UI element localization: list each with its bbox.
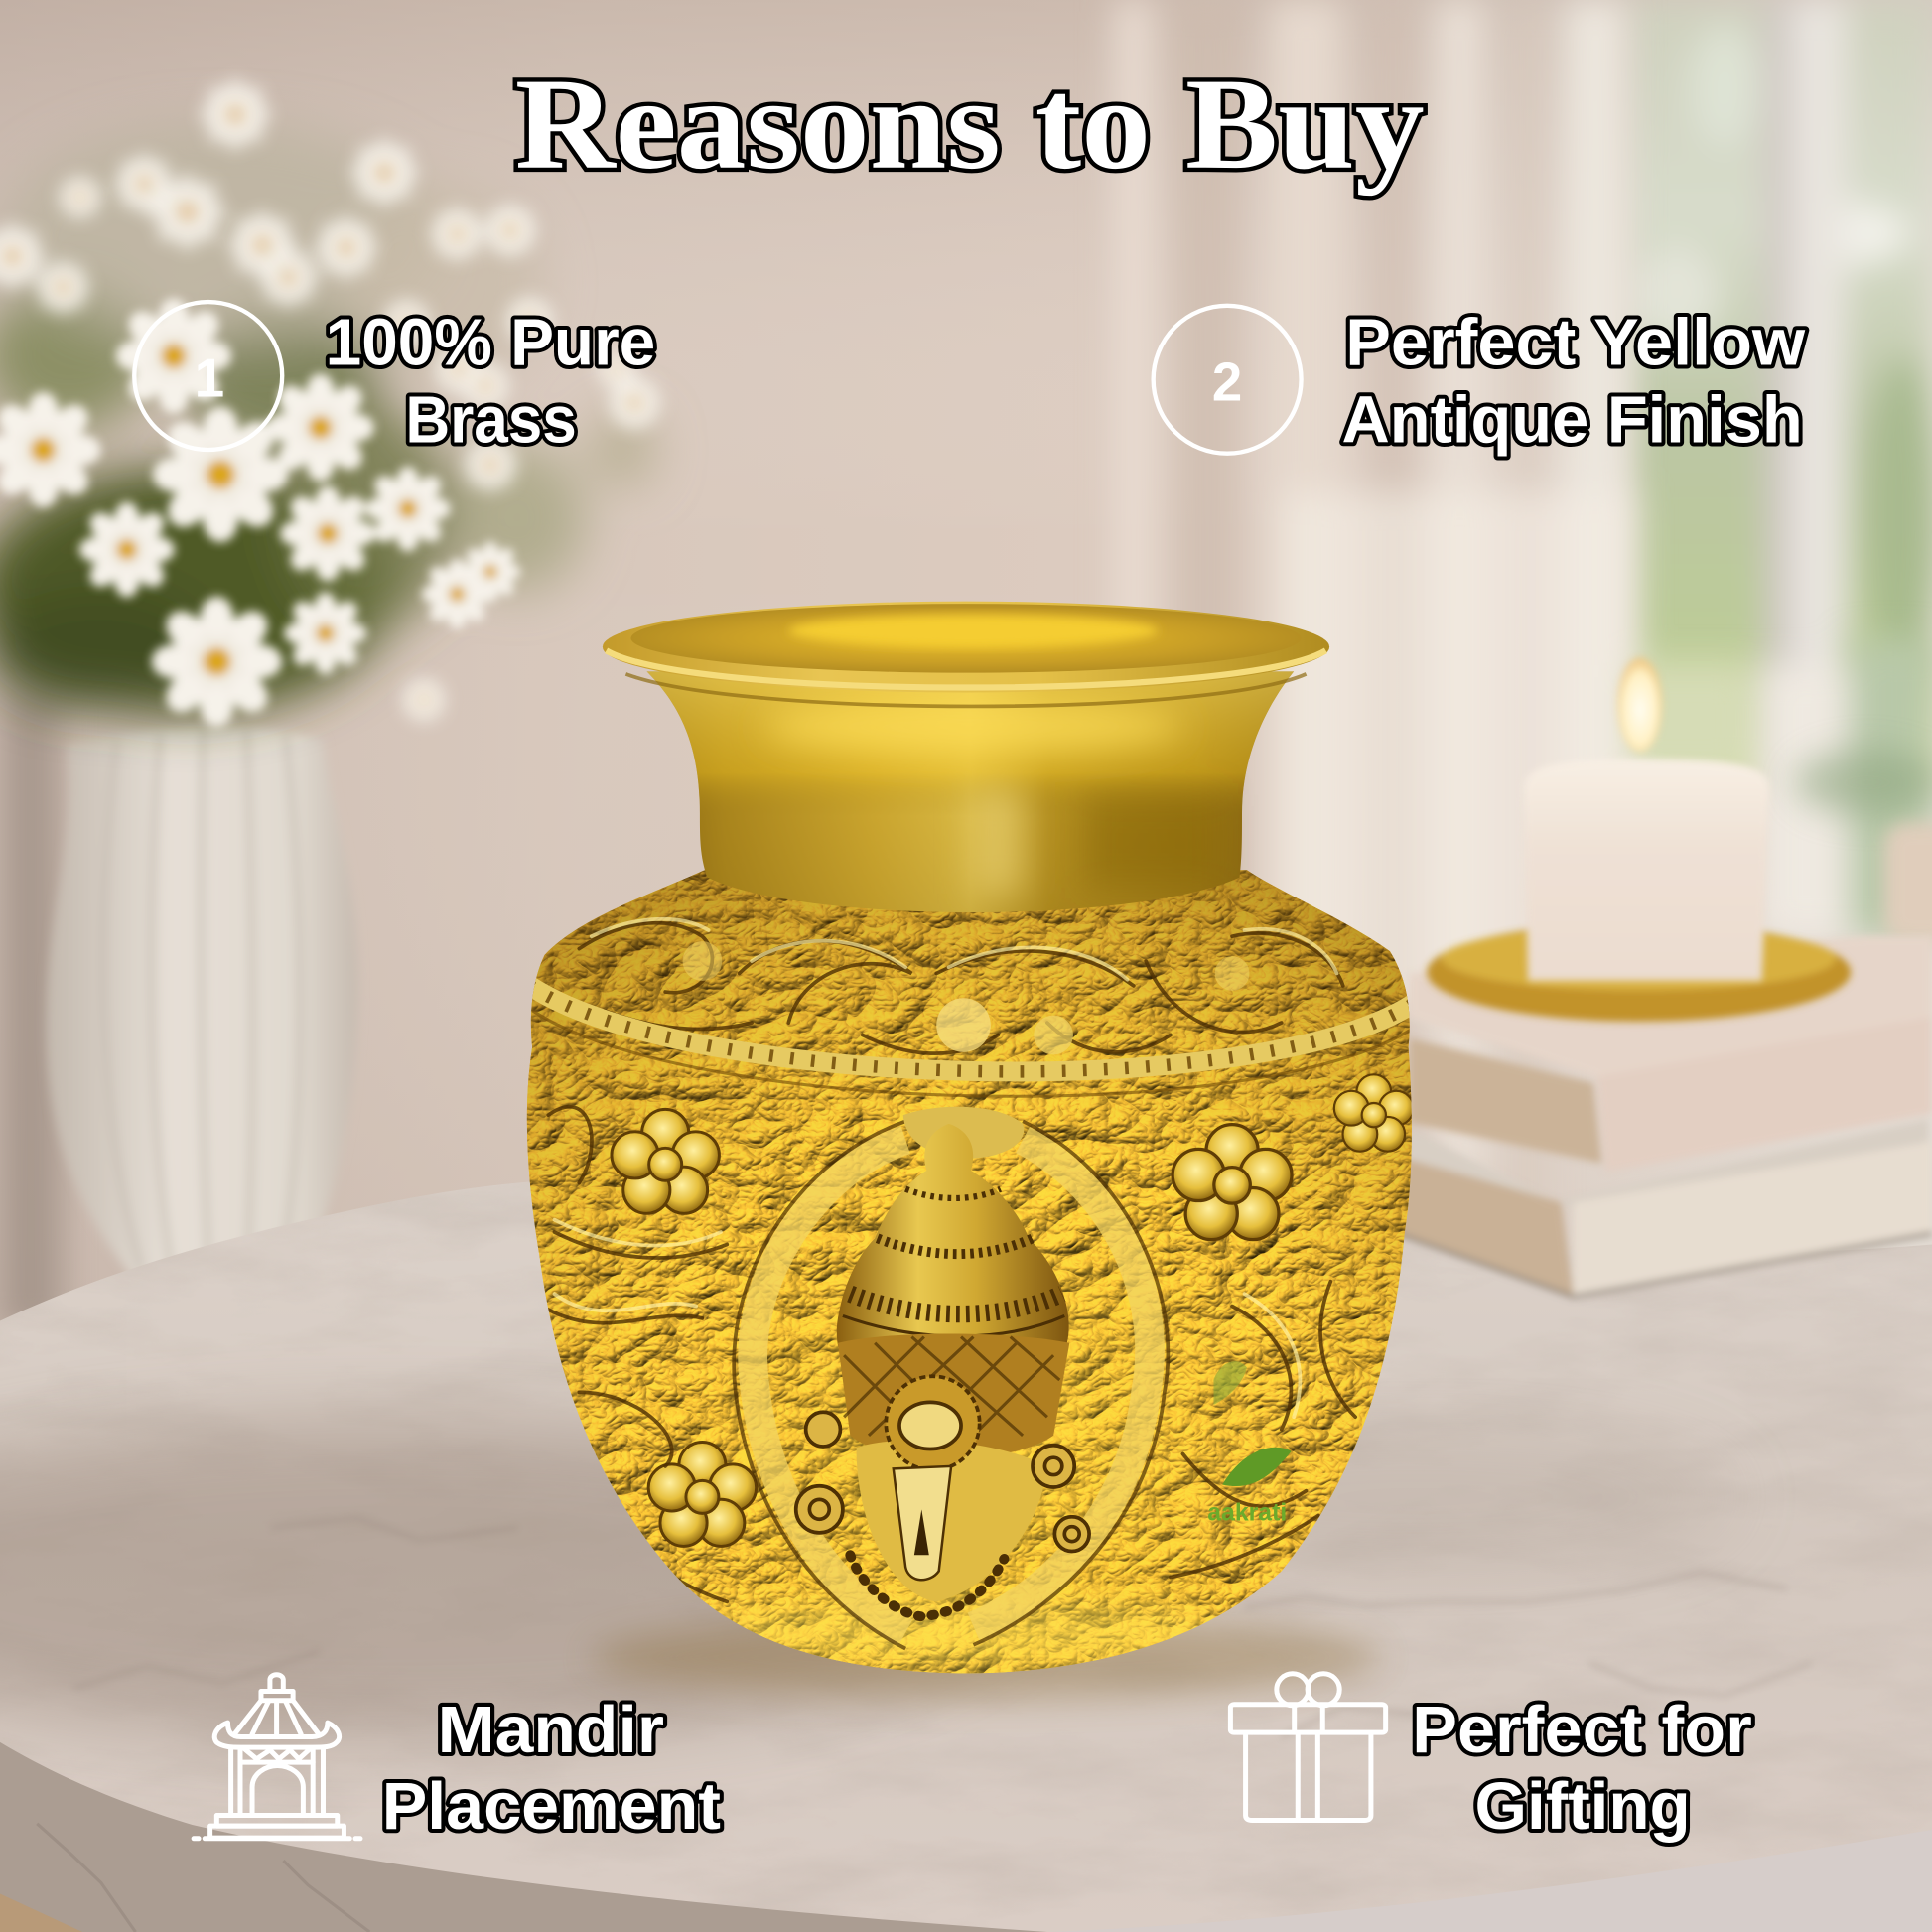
number badge 1 bbox=[134, 302, 282, 450]
brass tray bbox=[1427, 923, 1851, 1022]
label 2 bbox=[1342, 305, 1806, 458]
candle bbox=[1524, 759, 1769, 981]
shoulder scrollwork bbox=[579, 919, 1343, 1054]
label 4 bbox=[1412, 1693, 1752, 1844]
neck highlight bbox=[763, 700, 1220, 894]
background: window with garden bbox=[1629, 0, 1932, 788]
marble table top bbox=[0, 1159, 1932, 1932]
candle flame bbox=[1618, 658, 1662, 752]
label 1: 100% Pure bbox=[326, 305, 655, 379]
label 3: Placement bbox=[382, 1769, 721, 1844]
feature 1: pure brass bbox=[134, 302, 655, 458]
floral panels bbox=[542, 1074, 1414, 1601]
crown lattice bbox=[838, 1333, 1069, 1458]
number badge 1: 1 bbox=[195, 348, 224, 409]
number badge 2 bbox=[1154, 306, 1302, 454]
earrings bbox=[796, 1412, 1089, 1552]
forehead jewel bbox=[886, 1376, 980, 1470]
label 4: Perfect for bbox=[1412, 1693, 1752, 1767]
label 2: Antique Finish bbox=[1342, 383, 1803, 458]
label 4: Gifting bbox=[1475, 1769, 1691, 1844]
brass kalash vessel bbox=[517, 602, 1430, 1688]
face bbox=[857, 1441, 1047, 1601]
crown dome bbox=[837, 1124, 1069, 1380]
feature 3: mandir placement bbox=[194, 1675, 721, 1844]
label 3 bbox=[382, 1693, 721, 1844]
vessel neck bbox=[647, 671, 1294, 912]
crown bands bbox=[843, 1189, 1064, 1336]
embossed metal texture bbox=[517, 850, 1430, 1688]
vessel rim bbox=[603, 602, 1329, 706]
label 1: Brass bbox=[405, 383, 577, 458]
feature 2: antique finish bbox=[1154, 305, 1806, 458]
background: curtains bbox=[1115, 0, 1932, 1232]
icon: gift box bbox=[1230, 1674, 1386, 1820]
rope band bbox=[530, 986, 1412, 1096]
vessel body bbox=[527, 870, 1412, 1673]
icon: temple bbox=[194, 1675, 360, 1839]
watermark logo: aakrati bbox=[1207, 1499, 1287, 1526]
bead garland bbox=[850, 1555, 1004, 1616]
neck shading band bbox=[647, 671, 1294, 912]
crown top knob bbox=[903, 1107, 1024, 1159]
watermark logo bbox=[1207, 1361, 1292, 1526]
stacked books bbox=[1397, 936, 1932, 1297]
feature 4: perfect for gifting bbox=[1230, 1674, 1752, 1844]
white ribbed vase bbox=[47, 726, 358, 1282]
daisy bouquet bbox=[0, 79, 662, 727]
table front edge bbox=[0, 1742, 1932, 1932]
label 3: Mandir bbox=[438, 1693, 664, 1767]
medallion arch bbox=[734, 1121, 1168, 1649]
label 1 bbox=[326, 305, 655, 458]
background: distant plant and peach jar bbox=[1795, 751, 1932, 941]
deity crown and face bbox=[796, 1107, 1089, 1616]
label 2: Perfect Yellow bbox=[1345, 305, 1806, 379]
number badge 2: 2 bbox=[1212, 351, 1242, 412]
tilak mark bbox=[894, 1466, 951, 1580]
title: Reasons to Buy bbox=[515, 53, 1425, 197]
